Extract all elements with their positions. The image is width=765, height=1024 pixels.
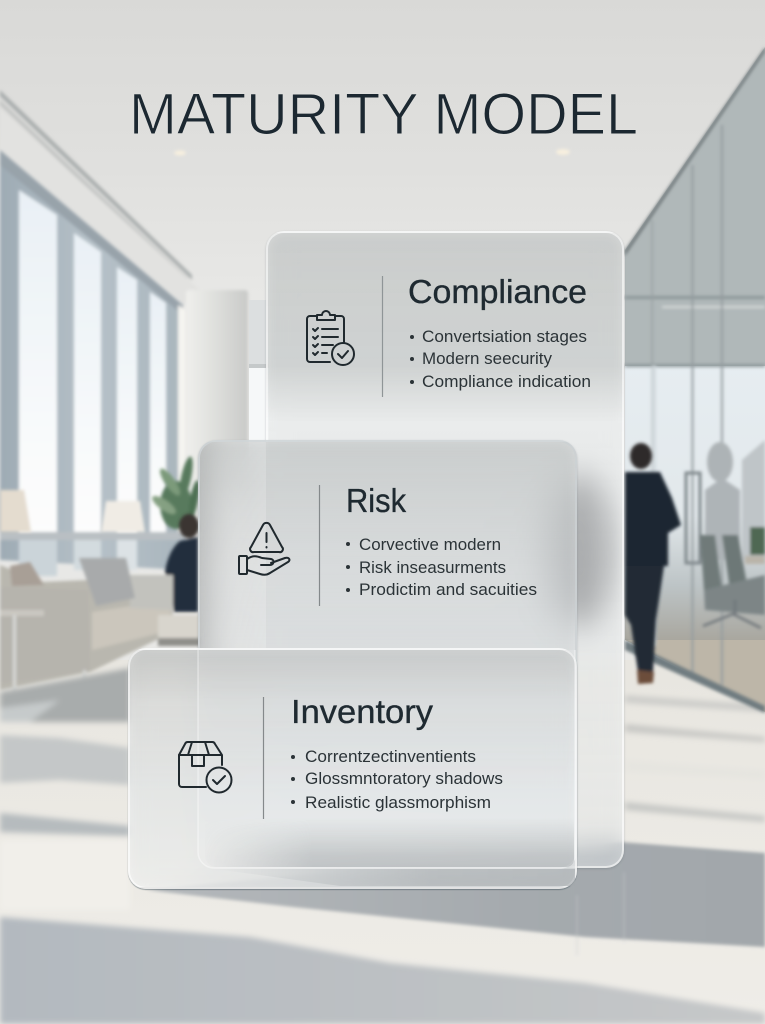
divider (382, 276, 384, 397)
bullet list: risk (346, 536, 537, 599)
icon: clipboard with check (307, 311, 354, 365)
panel: compliance (266, 231, 624, 868)
walking person (625, 443, 681, 684)
bullet list: risk: Risk inseasurments (359, 559, 506, 577)
plant (150, 455, 201, 529)
bullet list: inventory (291, 748, 503, 812)
bullet list: compliance (410, 328, 591, 391)
ceiling (0, 0, 765, 300)
divider (262, 697, 264, 819)
glass wall on the right (625, 47, 765, 366)
title: MATURITY MODEL (129, 82, 638, 147)
icon: package with check (179, 742, 232, 792)
bullet list: compliance: Modern seecurity (422, 350, 553, 368)
heading: risk: Risk (346, 482, 406, 519)
divider (318, 485, 320, 606)
floor reflections of the panels (577, 872, 624, 955)
floor (0, 660, 765, 1024)
heading: compliance: Compliance (408, 273, 587, 310)
panel: inventory (128, 648, 577, 889)
bullet list: inventory: Realistic glassmorphism (305, 794, 491, 812)
left window wall (0, 150, 186, 576)
icon: warning on open hand (239, 523, 289, 575)
bullet list: risk: Prodictim and sacuities (359, 581, 537, 599)
bullet list: compliance: Compliance indication (422, 373, 591, 391)
ghost of the risk panel behind the glass (198, 650, 575, 868)
lounge: lamps, sofa and seated person (0, 490, 200, 696)
panel: risk (198, 440, 577, 869)
bullet list: inventory: Correntzectinventients (305, 748, 476, 766)
bullet list: compliance: Convertsiation stages (422, 328, 587, 346)
heading: inventory: Inventory (291, 693, 434, 730)
bullet list: inventory: Glossmntoratory shadows (305, 770, 503, 788)
dark blur behind cards (550, 472, 610, 628)
bullet list: risk: Corvective modern (359, 536, 501, 554)
column (186, 290, 248, 490)
